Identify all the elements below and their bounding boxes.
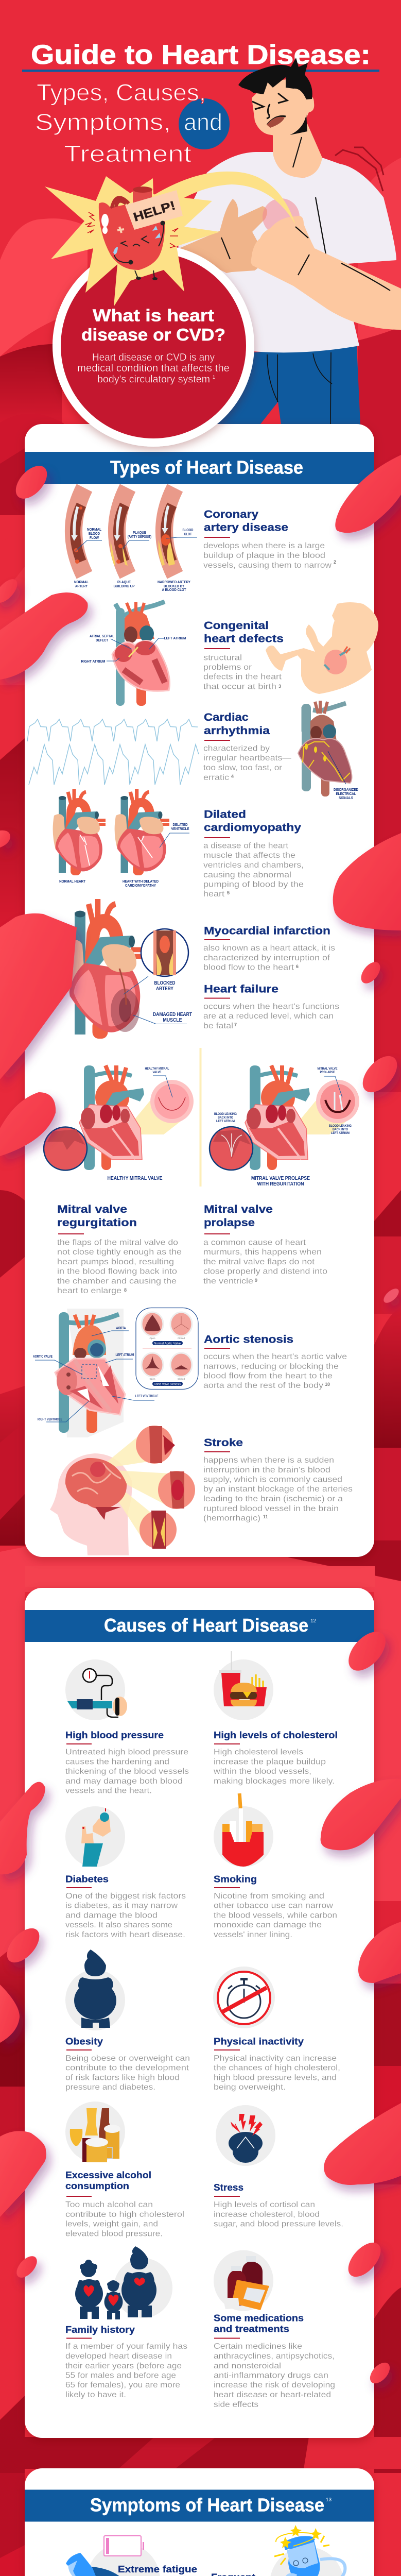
subtitle: and <box>184 109 222 135</box>
text: family history: 55 for males and before age <box>65 2371 176 2380</box>
item: congenital heart defects text: heart defects <box>204 633 284 645</box>
text: some medications and treatments <box>214 2312 335 2409</box>
item: heart failure text <box>203 984 339 1030</box>
text: stress: High levels of cortisol can <box>214 2200 315 2209</box>
illustration: mitral valve prolapse: PROLAPSE <box>320 1071 335 1074</box>
item: coronary artery disease text: Coronary <box>204 509 258 520</box>
item: myocardial infarction text: 6 <box>296 964 299 969</box>
text: high blood pressure: vessels and the heart. <box>65 1787 152 1795</box>
text: some medications and treatments: side effects <box>214 2400 258 2409</box>
item: myocardial infarction text: blood flow to the heart <box>203 963 294 972</box>
item: stroke text: supply, which is commonly caused <box>203 1476 342 1484</box>
text: obesity <box>65 2036 190 2092</box>
panel: symptoms of heart disease card <box>22 2468 386 2576</box>
item: stroke text <box>203 1437 353 1523</box>
illustration: mitral valve prolapse: MITRAL VALVE <box>317 1067 338 1071</box>
heading: what is heart disease <box>81 306 225 344</box>
text: obesity: Obesity <box>65 2036 103 2046</box>
text: definition: medical condition that affects the <box>77 363 230 374</box>
illustration: mitral valve prolapse: MITRAL VALVE PROLAPSE <box>251 1176 310 1181</box>
text: extreme fatigue: Extreme fatigue <box>118 2564 197 2574</box>
illustration: normal and dilated hearts: HEART WITH DELATED <box>123 879 159 884</box>
text: some medications and treatments: increase the risk of developing <box>214 2381 335 2389</box>
item: aortic stenosis text <box>203 1334 347 1390</box>
illustration: sad heart holding help sign: HELP! <box>132 198 177 225</box>
illustration: mitral valve prolapse: LEFT ATRIUM <box>216 1120 235 1123</box>
item: dilated cardiomyopathy text: causing the abnormal <box>203 871 291 879</box>
title: Guide to Heart Disease: <box>31 40 371 70</box>
item: mitral valve prolapse text: the mitral valve flaps do not <box>203 1258 315 1266</box>
text: physical inactivity: Physical inactivity <box>214 2036 304 2046</box>
chart: artery stages illustration: NARROWED ARTERY <box>158 580 190 584</box>
diagram: normal and stenotic aortic valves <box>136 1308 198 1389</box>
icon: obese figure <box>65 1950 125 2030</box>
item: congenital heart defects text: problems or <box>203 663 252 672</box>
item: mitral valve prolapse text: 9 <box>255 1278 257 1283</box>
chart: artery stages illustration: A BLOOD CLOT <box>162 587 186 592</box>
chart: artery stages illustration: BLOCKED BY <box>164 584 184 588</box>
illustration: mitral valve prolapse: BACK INTO <box>218 1116 233 1120</box>
item: mitral valve regurgitation text: heart to enlarge <box>57 1286 121 1295</box>
text: excessive alcohol consumption: contribute to high cholesterol <box>65 2210 184 2219</box>
item: dilated cardiomyopathy text: pumping of blood by the <box>203 880 304 889</box>
item: stroke text: by an instant blockage of the arteries <box>203 1485 353 1494</box>
item: mitral valve regurgitation text: Mitral valve <box>57 1204 127 1215</box>
chart: artery stages illustration: PLAQUE <box>133 530 146 535</box>
illustration: heart with blocked artery: MUSCLE <box>163 1018 182 1023</box>
chart: artery stages illustration: ARTERY <box>75 584 88 588</box>
diagram: normal and stenotic aortic valves: Closed <box>178 1378 185 1380</box>
illustration: aortic stenosis heart <box>33 1309 159 1437</box>
item: dilated cardiomyopathy text: ventricles and chambers, <box>203 861 304 870</box>
illustration: stroke brain and arteries <box>50 1426 195 1555</box>
item: cardiac arrhythmia text: characterized by <box>203 744 270 753</box>
text: family history: their earlier years (before age <box>65 2362 182 2370</box>
item: cardiac arrhythmia text: irregular heartbeats— <box>203 754 291 762</box>
illustration: dizzy man <box>270 2525 345 2576</box>
icon: stress <box>216 2105 275 2166</box>
text: high cholesterol: within the blood vessels, <box>213 1767 311 1776</box>
item: congenital heart defects text: that occur at birth <box>203 682 276 691</box>
text: excessive alcohol consumption <box>65 2170 184 2238</box>
subtitle: Types, Causes, <box>37 79 206 106</box>
item: mitral valve regurgitation text: not close tightly enough as the <box>57 1248 182 1257</box>
text: family history: Family history <box>65 2324 135 2335</box>
item: congenital heart defects text: Congenital <box>204 620 269 632</box>
item: coronary artery disease text: develops when there is a large <box>203 541 325 550</box>
item: cardiac arrhythmia text <box>203 711 291 782</box>
item: stroke text: leading to the brain (ischemic) or a <box>203 1495 343 1503</box>
diagram: normal and stenotic aortic valves: Open <box>149 1337 155 1340</box>
text: excessive alcohol consumption: consumption <box>65 2180 129 2191</box>
diagram: normal and stenotic aortic valves: Open <box>149 1378 155 1380</box>
chart: artery stages illustration: NORMAL <box>74 580 89 584</box>
illustration: congenital heart defect <box>81 602 186 706</box>
text: high blood pressure: thickening of the blood vessels <box>65 1767 189 1776</box>
item: mitral valve prolapse text: murmurs, this happens when <box>203 1248 322 1257</box>
text: high blood pressure: Untreated high blood pressure <box>65 1748 188 1757</box>
item: heart failure text: are at a reduced level, which can <box>203 1012 334 1021</box>
illustration: mitral valve prolapse: BLOOD LEAKING <box>214 1112 237 1116</box>
panel: causes of heart disease card <box>25 1588 374 2438</box>
diagram: normal and stenotic aortic valves: Aortic Valve Stenosis <box>154 1383 181 1386</box>
text: obesity: Being obese or overweight can <box>65 2054 190 2063</box>
item: mitral valve prolapse text: close properly and distend into <box>203 1267 327 1276</box>
item: mitral valve regurgitation text: the flaps of the mitral valve do <box>57 1239 178 1247</box>
item: dilated cardiomyopathy text: cardiomyopathy <box>204 822 301 834</box>
illustration: disorganized electrical signals heart: DISORGANIZED <box>334 787 358 792</box>
item: aortic stenosis text: aorta and the rest of the body <box>203 1381 323 1390</box>
heading: causes of heart disease: Causes of Heart Disease <box>104 1615 308 1636</box>
item: cardiac arrhythmia text: erratic <box>203 773 229 782</box>
item: dilated cardiomyopathy text: heart <box>203 890 225 899</box>
text: some medications and treatments: Some medications <box>214 2312 304 2323</box>
text: smoking: Smoking <box>214 1874 257 1885</box>
text: smoking <box>214 1874 337 1939</box>
illustration: normal and dilated hearts: CARDIOMYOPATHY <box>125 883 156 888</box>
text: some medications and treatments: heart disease or heart-related <box>214 2391 331 2399</box>
text: diabetes: vessels. It also shares some <box>65 1921 172 1929</box>
illustration: heart with blocked artery: DAMAGED HEART <box>153 1012 192 1018</box>
text: some medications and treatments: and treatments <box>214 2323 289 2334</box>
item: cardiac arrhythmia text: arrhythmia <box>204 725 270 737</box>
item: dilated cardiomyopathy text: 5 <box>227 890 230 895</box>
item: heart failure text: 7 <box>234 1022 237 1027</box>
icon: family with hearts <box>75 2246 172 2319</box>
item: congenital heart defects text: defects in the heart <box>203 673 282 682</box>
text: high cholesterol: increase the plaque buildup <box>214 1757 326 1766</box>
text: smoking: monoxide can damage the <box>214 1921 322 1929</box>
title block <box>22 40 379 167</box>
illustration: mitral valve prolapse <box>210 1065 359 1187</box>
subtitle: Symptoms, <box>35 109 171 135</box>
text: excessive alcohol consumption: levels, weight gain, and <box>65 2220 158 2229</box>
illustration: congenital heart defect: ATRIAL SEPTAL <box>90 634 114 638</box>
text: high blood pressure: causes the hardening and <box>65 1757 169 1766</box>
text: diabetes: and damage the blood <box>65 1911 158 1920</box>
illustration: healthy mitral valve: HEALTHY MITRAL <box>145 1067 169 1071</box>
illustration: heart with blocked artery: ARTERY <box>156 986 173 992</box>
text: definition: Heart disease or CVD is any <box>92 352 215 363</box>
illustration: extreme fatigue man <box>64 2536 160 2576</box>
text: definition: 1 <box>213 375 215 380</box>
text: some medications and treatments: anthracyclines, antipsychotics, <box>214 2352 335 2361</box>
text: smoking: Nicotine from smoking and <box>214 1892 324 1901</box>
text: diabetes: Diabetes <box>65 1874 109 1885</box>
illustration: congenital heart defect: LEFT ATRIUM <box>164 636 186 640</box>
chart: artery stages illustration <box>72 488 197 592</box>
text: high cholesterol: making blockages more likely. <box>214 1777 335 1786</box>
text: diabetes: risk factors with heart disease. <box>65 1930 185 1939</box>
text: physical inactivity: Physical inactivity can increase <box>214 2054 337 2063</box>
item: cardiac arrhythmia text: 4 <box>231 774 234 779</box>
item: mitral valve regurgitation text: in the blood flowing back into <box>57 1267 177 1276</box>
illustration: normal and dilated hearts: NORMAL HEART <box>59 879 85 884</box>
text: high cholesterol: High levels of cholesterol <box>214 1730 338 1740</box>
item: myocardial infarction text <box>203 925 335 972</box>
illustration: man clutching his chest <box>153 58 401 425</box>
heading: what is heart disease: What is heart <box>93 306 214 325</box>
illustration: congenital heart defect: DEFECT <box>96 638 108 642</box>
illustration: normal and dilated hearts <box>53 789 189 888</box>
chart: arrhythmia ECG waves <box>27 719 199 785</box>
heading: symptoms of heart disease: Symptoms of Heart Disease <box>90 2495 324 2516</box>
item: cardiac arrhythmia text: too slow, too fast, or <box>203 764 283 772</box>
text: family history: likely to have it. <box>65 2391 126 2399</box>
item: heart failure text: Heart failure <box>204 984 278 995</box>
chart: artery stages illustration: BLOOD <box>89 531 100 536</box>
item: stroke text: interruption in the brain's blood <box>203 1466 330 1475</box>
subtitle: Treatment <box>64 141 192 167</box>
text: some medications and treatments: and nonsteroidal <box>214 2362 281 2370</box>
text: high blood pressure: High blood pressure <box>65 1730 164 1740</box>
floating decorative blood-cell blobs <box>0 455 401 2387</box>
illustration: normal and dilated hearts: VENTRICLE <box>171 826 189 831</box>
illustration: mitral valve prolapse: LEFT ATRIUM <box>331 1131 350 1135</box>
text: high cholesterol: High cholesterol levels <box>214 1748 303 1757</box>
heading: what is heart disease: disease or CVD? <box>81 325 225 344</box>
text: diabetes: One of the biggest risk factors <box>65 1892 186 1901</box>
item: aortic stenosis text: narrows, reducing or blocking the <box>203 1362 339 1371</box>
illustration: aortic stenosis heart: AORTIC VALVE <box>33 1354 53 1359</box>
text: family history: 65 for females), you are more <box>65 2381 180 2389</box>
item: congenital heart defects text: structural <box>203 653 242 663</box>
illustration: congenital heart defect: RIGHT ATRIUM <box>81 659 105 664</box>
text: physical inactivity: the chances of high cholesterol, <box>214 2064 340 2073</box>
item: cardiac arrhythmia text: Cardiac <box>204 711 249 723</box>
item: mitral valve regurgitation text: 8 <box>124 1287 127 1293</box>
illustration: heart with blocked artery <box>66 899 192 1039</box>
item: myocardial infarction text: characterized by interruption of <box>203 954 330 962</box>
item: stroke text: 11 <box>263 1514 268 1519</box>
text: high blood pressure: and may damage both blood <box>65 1777 183 1786</box>
icon: cigarettes <box>214 1793 273 1867</box>
illustration: healthy mitral valve <box>44 1065 194 1181</box>
item: mitral valve prolapse text: prolapse <box>204 1217 255 1229</box>
item: coronary artery disease text: 2 <box>334 560 336 565</box>
text: excessive alcohol consumption: Excessive alcohol <box>65 2170 151 2180</box>
item: aortic stenosis text: 10 <box>325 1382 330 1387</box>
heading: symptoms of heart disease: 13 <box>326 2497 332 2503</box>
text: definition: body's circulatory system <box>97 374 210 385</box>
chart: artery stages illustration: BUILDING UP <box>113 584 135 588</box>
icon: medications <box>214 2250 273 2311</box>
diagram: normal and stenotic aortic valves: Normal Aortic Valve <box>154 1343 181 1346</box>
illustration: aortic stenosis heart: AORTA <box>116 1326 126 1330</box>
text: obesity: of risk factors like high blood <box>65 2073 180 2082</box>
item: mitral valve prolapse text: Mitral valve <box>204 1204 273 1215</box>
illustration: normal and dilated hearts: DELATED <box>173 822 188 827</box>
item: congenital heart defects text <box>203 620 284 691</box>
text: family history <box>65 2324 187 2399</box>
item: mitral valve regurgitation text: heart pumps blood, resulting <box>57 1258 174 1266</box>
text: family history: If a member of your family has <box>65 2342 187 2351</box>
item: stroke text: ruptured blood vessel in the brain <box>203 1504 339 1513</box>
panel: what is heart disease circle <box>53 245 254 447</box>
item: coronary artery disease text: vessels, causing them to narrow <box>203 561 332 570</box>
text: smoking: the blood vessels, while carbon <box>214 1911 337 1920</box>
icon: fast food <box>214 1651 273 1720</box>
item: mitral valve prolapse text <box>203 1204 327 1286</box>
text: high blood pressure <box>65 1730 189 1795</box>
illustration: mitral valve prolapse: BLOOD LEAKING <box>329 1124 352 1128</box>
text: stress <box>214 2182 343 2229</box>
item: coronary artery disease text <box>203 509 336 570</box>
item: heart failure text: occurs when the heart's functions <box>203 1002 339 1011</box>
illustration: baby with heart <box>266 602 378 694</box>
item: coronary artery disease text: buildup of plaque in the blood <box>203 551 325 560</box>
subtitle <box>35 79 230 167</box>
illustration: disorganized electrical signals heart: SIGNALS <box>339 795 353 800</box>
illustration: disorganized electrical signals heart: ELECTRICAL <box>336 791 356 796</box>
text: diabetes: is diabetes, as it may narrow <box>65 1902 178 1910</box>
text: physical inactivity: high blood pressure levels, and <box>214 2073 337 2082</box>
heading: types of heart disease: Types of Heart Disease <box>110 456 303 478</box>
text: excessive alcohol consumption: Too much alcohol can <box>65 2200 153 2209</box>
item: heart failure text: be fatal <box>203 1022 233 1030</box>
text: high cholesterol <box>213 1730 338 1786</box>
icon: alcohol bottles <box>65 2102 125 2162</box>
text: stress: Stress <box>214 2182 243 2193</box>
illustration: aortic stenosis heart: LEFT ATRIUM <box>115 1352 134 1357</box>
item: mitral valve regurgitation text <box>57 1204 182 1295</box>
item: mitral valve regurgitation text: regurgitation <box>57 1217 137 1229</box>
illustration: disorganized electrical signals heart <box>298 701 358 800</box>
chart: artery stages illustration: BLOOD <box>182 528 194 532</box>
panel: types of heart disease card <box>25 424 378 1557</box>
chart: artery stages illustration: CLOT <box>184 532 192 536</box>
item: coronary artery disease text: artery disease <box>204 521 288 534</box>
diagram: normal and stenotic aortic valves: Closed <box>178 1337 185 1340</box>
item: mitral valve regurgitation text: the chamber and causing the <box>57 1277 177 1286</box>
chart: artery stages illustration: (FATTY DEPOSIT) <box>128 534 151 539</box>
text: stress: sugar, and blood pressure levels. <box>214 2220 343 2229</box>
illustration: heart with blocked artery: BLOCKED <box>154 980 175 986</box>
heading: causes of heart disease: 12 <box>310 1618 317 1624</box>
text: physical inactivity: being overweight. <box>214 2083 286 2092</box>
item: aortic stenosis text: blood flow from the heart to the <box>203 1371 333 1381</box>
text: obesity: contribute to the development <box>65 2064 189 2073</box>
text: smoking: vessels' inner lining. <box>214 1930 292 1939</box>
text: diabetes <box>65 1874 186 1939</box>
illustration: healthy mitral valve: HEALTHY MITRAL VALVE <box>107 1176 163 1181</box>
text: smoking: other tobacco use can narrow <box>214 1902 333 1910</box>
illustration: mitral valve prolapse: WITH REGURITATION <box>257 1181 304 1187</box>
illustration: sad heart holding help sign <box>45 176 220 307</box>
item: myocardial infarction text: also known as a heart attack, it is <box>203 944 335 953</box>
text: obesity: pressure and diabetes. <box>65 2083 155 2092</box>
item: stroke text: happens when there is a sudden <box>203 1456 334 1465</box>
item: congenital heart defects text: 3 <box>278 684 281 689</box>
item: stroke text: Stroke <box>204 1437 243 1449</box>
item: mitral valve prolapse text: the ventricle <box>203 1277 253 1286</box>
illustration: aortic stenosis heart: RIGHT VENTRICLE <box>38 1417 62 1421</box>
illustration: healthy mitral valve: VALVE <box>152 1071 162 1074</box>
item: aortic stenosis text: occurs when the heart's aortic valve <box>203 1352 347 1361</box>
illustration: mitral valve prolapse: BACK INTO <box>333 1128 348 1131</box>
item: mitral valve prolapse text: a common cause of heart <box>203 1239 306 1247</box>
item: aortic stenosis text: Aortic stenosis <box>204 1334 293 1346</box>
icon: no physical activity stopwatch <box>213 1967 275 2028</box>
chart: artery stages illustration: FLOW <box>90 535 99 540</box>
item: dilated cardiomyopathy text <box>203 809 304 899</box>
item: dilated cardiomyopathy text: Dilated <box>204 809 246 821</box>
text: stress: increase cholesterol, blood <box>214 2210 320 2219</box>
icon: diabetes finger test <box>65 1806 125 1867</box>
text: physical inactivity <box>214 2036 340 2092</box>
icon: blood pressure cuff <box>65 1659 127 1720</box>
text: family history: developed heart disease in <box>65 2352 172 2361</box>
text: some medications and treatments: Certain medicines like <box>214 2342 302 2351</box>
illustration: aortic stenosis heart: LEFT VENTRICLE <box>135 1394 159 1398</box>
text: excessive alcohol consumption: elevated blood pressure. <box>65 2230 163 2238</box>
item: dilated cardiomyopathy text: muscle that affects the <box>203 851 295 860</box>
item: stroke text: (hemorrhagic) <box>203 1514 260 1523</box>
item: myocardial infarction text: Myocardial infarction <box>204 925 330 937</box>
text: definition <box>77 352 230 385</box>
chart: artery stages illustration: PLAQUE <box>117 580 131 584</box>
item: dilated cardiomyopathy text: a disease of the heart <box>203 842 289 851</box>
text: some medications and treatments: anti-inflammatory drugs can <box>214 2371 328 2380</box>
chart: artery stages illustration: NORMAL <box>87 527 101 532</box>
